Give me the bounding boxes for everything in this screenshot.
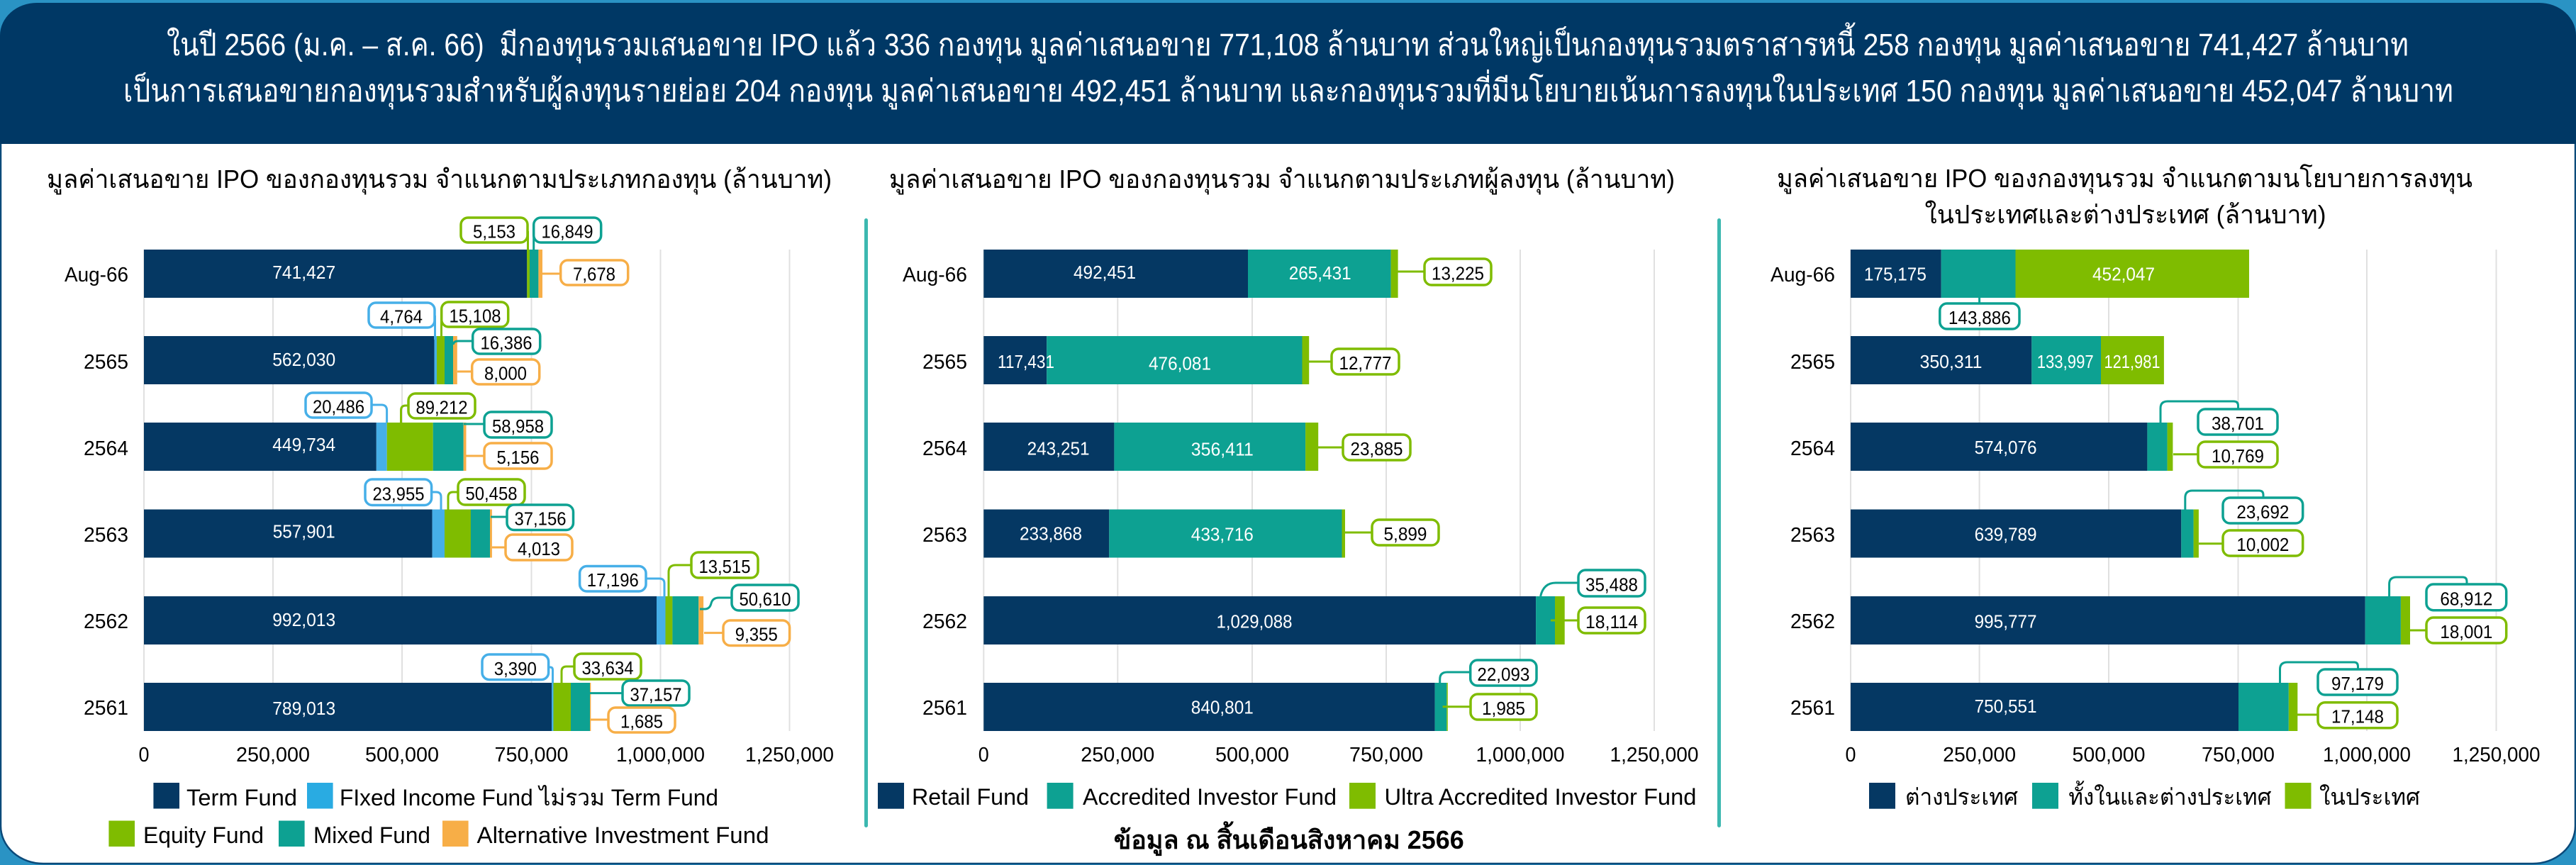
- chart 1 row 2565: 16,386: [481, 332, 532, 353]
- chart 2 row 2564: 23,885: [1350, 438, 1403, 459]
- chart 2 row 2565: [983, 336, 1399, 384]
- chart 3 row 2561: 97,179: [2331, 673, 2384, 694]
- chart 3 x axis labels: 750,000: [2202, 744, 2275, 766]
- chart 1 row 2562: 17,196: [587, 569, 639, 591]
- chart 3 category labels: 2564: [1790, 437, 1835, 460]
- chart 1 row 2561: 3,390: [494, 658, 537, 679]
- chart 3 row 2564: 574,076: [1975, 437, 2037, 458]
- chart 2 x axis labels: 1,250,000: [1610, 744, 1699, 766]
- chart 3 row 2561: [1851, 662, 2397, 731]
- chart 1 legend: [108, 783, 769, 848]
- chart 1 row 2565: 8,000: [484, 363, 527, 384]
- chart 1 legend: Equity Fund: [143, 822, 264, 848]
- chart 1 category labels: [65, 264, 128, 720]
- chart 2 row 2563: 5,899: [1384, 523, 1427, 545]
- chart 2 row 2562: 1,029,088: [1217, 611, 1292, 632]
- chart 1 row 2565: 562,030: [272, 349, 335, 370]
- footer data note: ข้อมูล ณ สิ้นเดือนสิงหาคม 2566: [1114, 821, 1464, 856]
- chart 1 row 2564: 20,486: [313, 396, 364, 417]
- chart 1 row 2561: 789,013: [272, 698, 335, 719]
- chart 1 category labels: 2564: [84, 437, 128, 460]
- chart 2 row 2561: 1,985: [1482, 698, 1525, 719]
- chart 2 row 2564: 356,411: [1191, 439, 1254, 460]
- chart 3 category labels: 2563: [1790, 524, 1835, 547]
- chart 2 row 2562: [983, 570, 1645, 644]
- chart 1 x axis labels: 500,000: [365, 744, 439, 766]
- chart 1 x axis labels: 1,250,000: [745, 744, 834, 766]
- chart 3 row 2562: 995,777: [1975, 611, 2037, 632]
- chart 1 category labels: 2565: [84, 351, 128, 374]
- chart 3 x axis labels: 500,000: [2072, 744, 2146, 766]
- chart 3 row 2563: 10,002: [2236, 534, 2289, 555]
- chart 1 row 2562: 992,013: [272, 609, 335, 630]
- chart 2 row 2562: 35,488: [1585, 574, 1638, 596]
- chart 3 row 2563: 23,692: [2236, 501, 2289, 523]
- chart 1 row 2564: 449,734: [272, 434, 335, 455]
- chart 3 row Aug-66: [1851, 250, 2249, 329]
- chart 2 row 2565: 476,081: [1149, 353, 1211, 374]
- chart 2 category labels: 2565: [922, 351, 967, 374]
- chart 3 row 2564: [1851, 401, 2277, 471]
- chart 2 row 2564: [983, 423, 1410, 471]
- chart 1 row 2562: [144, 552, 798, 645]
- chart 2 row 2564: 243,251: [1027, 438, 1090, 459]
- chart 1 x axis labels: 250,000: [236, 744, 310, 766]
- chart 1 row 2564: [144, 393, 552, 471]
- chart 2 x axis labels: 500,000: [1215, 744, 1289, 766]
- chart 2 legend: Accredited Investor Fund: [1083, 784, 1337, 810]
- chart 1 row Aug-66: 5,153: [473, 221, 515, 242]
- chart 3 row 2562: [1851, 577, 2507, 644]
- chart 2 x axis labels: 0: [978, 744, 989, 766]
- chart 2 title: มูลค่าเสนอขาย IPO ของกองทุนรวม จำแนกตามประเภทผู้ลงทุน (ล้านบาท): [889, 164, 1675, 195]
- chart 2 row Aug-66: [983, 250, 1491, 298]
- chart 3 legend: ในประเทศ: [2319, 784, 2420, 810]
- chart 1 legend: Mixed Fund: [313, 822, 430, 848]
- panel: chart by fund type: [47, 164, 834, 848]
- chart 1 row 2565: 15,108: [450, 305, 501, 326]
- chart 1 row 2561: [144, 654, 689, 732]
- chart 1 category labels: 2562: [84, 610, 128, 633]
- chart 3 row Aug-66: 452,047: [2092, 264, 2155, 285]
- chart 1 row Aug-66: [144, 218, 628, 298]
- chart 2 row 2561: 22,093: [1477, 664, 1529, 685]
- chart 3 title: [1777, 164, 2472, 229]
- panel: chart by investor type: [878, 164, 1699, 810]
- chart 3 row Aug-66: 175,175: [1864, 264, 1927, 285]
- chart 1 row 2561: 37,157: [630, 683, 682, 705]
- chart 2 row 2565: 12,777: [1339, 352, 1391, 374]
- chart 3 row 2565: [1851, 336, 2164, 384]
- chart 3 category labels: 2562: [1790, 610, 1835, 633]
- chart 1 row 2564: 58,958: [492, 415, 544, 437]
- chart 2 row 2563: [983, 509, 1439, 557]
- chart 3 legend: [1869, 781, 2420, 810]
- chart 1 row 2563: 4,013: [518, 538, 560, 559]
- chart 2 category labels: 2561: [922, 697, 967, 720]
- chart 3 row 2565: 133,997: [2037, 351, 2094, 372]
- chart 3 x axis labels: 1,000,000: [2323, 744, 2411, 766]
- chart 2 category labels: 2564: [922, 437, 967, 460]
- chart 3 title: ในประเทศและต่างประเทศ (ล้านบาท): [1924, 200, 2326, 229]
- chart 2 category labels: 2563: [922, 524, 967, 547]
- header banner: [0, 3, 2576, 144]
- chart 3 category labels: 2561: [1790, 697, 1835, 720]
- chart 3 category labels: Aug-66: [1771, 264, 1835, 286]
- chart 3 row 2564: 10,769: [2212, 445, 2264, 467]
- chart 3 legend: ต่างประเทศ: [1905, 784, 2018, 810]
- chart 1 category labels: 2563: [84, 524, 128, 547]
- chart 2 row 2563: 233,868: [1020, 523, 1082, 545]
- chart 1 row 2563: 23,955: [373, 484, 424, 505]
- chart 2 legend: Retail Fund: [912, 784, 1029, 810]
- chart 1 title: มูลค่าเสนอขาย IPO ของกองทุนรวม จำแนกตามประเภทกองทุน (ล้านบาท): [47, 164, 832, 195]
- chart 3 row 2561: 17,148: [2331, 706, 2384, 727]
- chart 1 row 2563: 557,901: [273, 521, 335, 542]
- chart 2 category labels: [903, 264, 967, 720]
- chart 1 row 2565: 4,764: [380, 306, 423, 328]
- panel: chart by investment policy: [1771, 164, 2540, 810]
- chart 2 row Aug-66: 265,431: [1289, 262, 1351, 284]
- chart 1 x axis labels: 1,000,000: [616, 744, 705, 766]
- chart 3 row 2563: 639,789: [1975, 524, 2037, 545]
- chart 1 row 2564: 5,156: [496, 447, 539, 468]
- chart 2 row 2562: 18,114: [1585, 611, 1638, 632]
- chart 2 row 2561: 840,801: [1191, 697, 1254, 718]
- chart 2 row Aug-66: 492,451: [1074, 262, 1136, 283]
- chart 1 row 2562: 50,610: [739, 588, 791, 610]
- chart 3 x axis labels: 250,000: [1943, 744, 2016, 766]
- chart 2 x axis labels: 1,000,000: [1476, 744, 1564, 766]
- chart 2 legend: Ultra Accredited Investor Fund: [1384, 784, 1696, 810]
- chart 1 row 2561: 33,634: [581, 657, 634, 679]
- chart 1 row 2564: 89,212: [416, 397, 468, 418]
- chart 1 legend: FIxed Income Fund ไม่รวม Term Fund: [340, 785, 718, 810]
- chart 1 row 2562: 9,355: [735, 624, 778, 645]
- panel divider 1: [864, 218, 868, 827]
- panel divider 2: [1717, 218, 1721, 827]
- chart 1 legend: Alternative Investment Fund: [476, 822, 769, 848]
- chart 3 x axis labels: 1,250,000: [2452, 744, 2540, 766]
- chart 1 row 2563: 50,458: [465, 483, 518, 504]
- chart 3 row Aug-66: 143,886: [1948, 307, 2011, 328]
- chart 2 x axis labels: [978, 744, 1699, 766]
- chart 1 row Aug-66: 7,678: [573, 264, 615, 285]
- chart 3 row 2565: 121,981: [2104, 351, 2160, 372]
- chart 2 row 2565: 117,431: [998, 351, 1054, 372]
- chart 3 row 2565: 350,311: [1920, 351, 1983, 372]
- chart 1 category labels: Aug-66: [65, 264, 128, 286]
- chart 3 row 2563: [1851, 491, 2303, 557]
- chart 2 x axis labels: 750,000: [1349, 744, 1423, 766]
- chart 1 x axis labels: 0: [139, 744, 149, 766]
- chart 1 x axis labels: 750,000: [495, 744, 569, 766]
- chart 1 row 2563: 37,156: [515, 508, 566, 529]
- chart 3 row 2561: 750,551: [1975, 696, 2037, 717]
- chart 1 category labels: 2561: [84, 697, 128, 720]
- chart 3 row 2562: 18,001: [2440, 621, 2492, 642]
- chart 1 row 2561: 1,685: [620, 710, 663, 732]
- chart 2 row 2563: 433,716: [1191, 524, 1254, 545]
- chart 3 category labels: [1771, 264, 1835, 720]
- chart 2 x axis labels: 250,000: [1081, 744, 1154, 766]
- chart 1 legend: Term Fund: [186, 785, 297, 810]
- chart 2 legend: [878, 783, 1696, 810]
- chart 2 row 2561: [983, 660, 1537, 731]
- chart 3 row 2562: 68,912: [2440, 588, 2492, 610]
- chart 2 category labels: 2562: [922, 610, 967, 633]
- chart 3 category labels: 2565: [1790, 351, 1835, 374]
- chart 1 row 2565: [144, 302, 540, 384]
- chart 2 row Aug-66: 13,225: [1432, 262, 1484, 284]
- chart 3 x axis labels: [1845, 744, 2540, 766]
- chart 1 row 2563: [144, 479, 573, 560]
- chart 3 x axis labels: 0: [1845, 744, 1856, 766]
- chart 1 row 2562: 13,515: [699, 556, 750, 577]
- chart 3 legend: ทั้งในและต่างประเทศ: [2068, 781, 2271, 810]
- chart 1 x axis labels: [139, 744, 834, 766]
- chart 3 row 2564: 38,701: [2212, 413, 2264, 434]
- chart 3 title: มูลค่าเสนอขาย IPO ของกองทุนรวม จำแนกตามนโยบายการลงทุน: [1777, 164, 2472, 194]
- chart 2 category labels: Aug-66: [903, 264, 967, 286]
- chart 1 row Aug-66: 741,427: [272, 262, 335, 283]
- chart 1 row Aug-66: 16,849: [542, 221, 593, 242]
